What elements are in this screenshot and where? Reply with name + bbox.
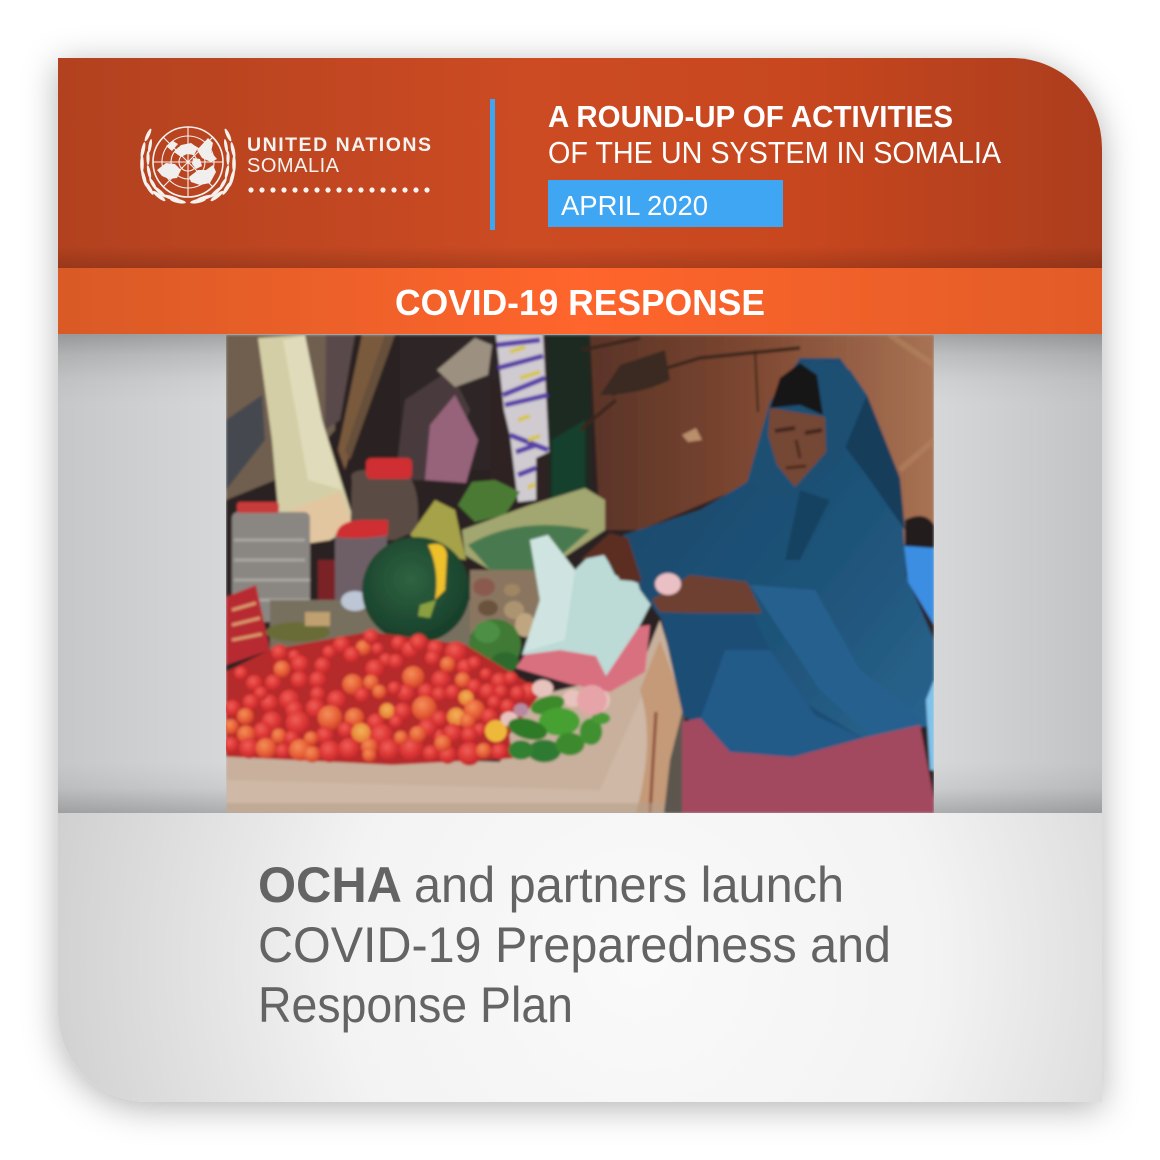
- date badge: APRIL 2020: [561, 190, 708, 221]
- tarp wall: [590, 335, 934, 545]
- photo background: [226, 335, 934, 813]
- panel: lower caption background: [58, 813, 1102, 1102]
- woman's garment: [623, 358, 934, 757]
- icon: UN emblem: [140, 127, 236, 205]
- body text: headline: and partners launch: [414, 857, 844, 913]
- maroon skirt: [682, 718, 934, 813]
- hanging plastic bag: [258, 335, 353, 543]
- date badge: [548, 180, 783, 227]
- heading: round-up title: OF THE UN SYSTEM IN SOMALIA: [548, 135, 1001, 170]
- woman's face and cap: [768, 363, 826, 487]
- pumpkin: [362, 537, 470, 643]
- leafy greens and green bag: [410, 480, 605, 570]
- clear plastic bag with radishes: [516, 535, 658, 715]
- snack sachet strips: [496, 335, 549, 502]
- text: United Nations Somalia wordmark: [247, 134, 431, 193]
- heading: covid-19 response: COVID-19 RESPONSE: [395, 282, 765, 323]
- blue plastic chair: [904, 546, 934, 770]
- panel: covid response band: [58, 268, 1102, 334]
- tomatoes: [223, 629, 610, 766]
- tarp branches: [580, 335, 934, 550]
- stall table: [226, 620, 690, 813]
- text: United Nations Somalia wordmark: SOMALIA: [247, 155, 340, 177]
- icon: left olive wreath: [140, 128, 186, 205]
- icon: right olive wreath: [190, 128, 236, 205]
- tin can: [226, 585, 270, 665]
- body text: headline: OCHA: [258, 857, 402, 913]
- potatoes: [470, 570, 540, 637]
- panel: grey photo backdrop: [58, 334, 1102, 813]
- basket and stall floor: [266, 591, 470, 650]
- panel: header: [58, 58, 1102, 268]
- body text: headline: COVID-19 Preparedness and: [258, 917, 891, 973]
- photo: woman selling vegetables at a market stall: [223, 335, 934, 813]
- body text: headline: Response Plan: [258, 977, 573, 1033]
- text: United Nations Somalia wordmark: UNITED NATIONS: [247, 134, 431, 156]
- parsley: [469, 619, 521, 672]
- plastic jars with red lids: [232, 458, 418, 622]
- heading: round-up title: A ROUND-UP OF ACTIVITIES: [548, 99, 953, 134]
- vertical divider: [490, 99, 495, 230]
- green peppers: [506, 692, 610, 762]
- heading: round-up title: [548, 99, 1001, 170]
- body text: headline: [258, 857, 891, 1033]
- dotted rule: [248, 187, 430, 193]
- pale onions: [501, 680, 610, 726]
- icon: globe land masses: [157, 138, 217, 185]
- woman's hands and onion: [580, 533, 762, 613]
